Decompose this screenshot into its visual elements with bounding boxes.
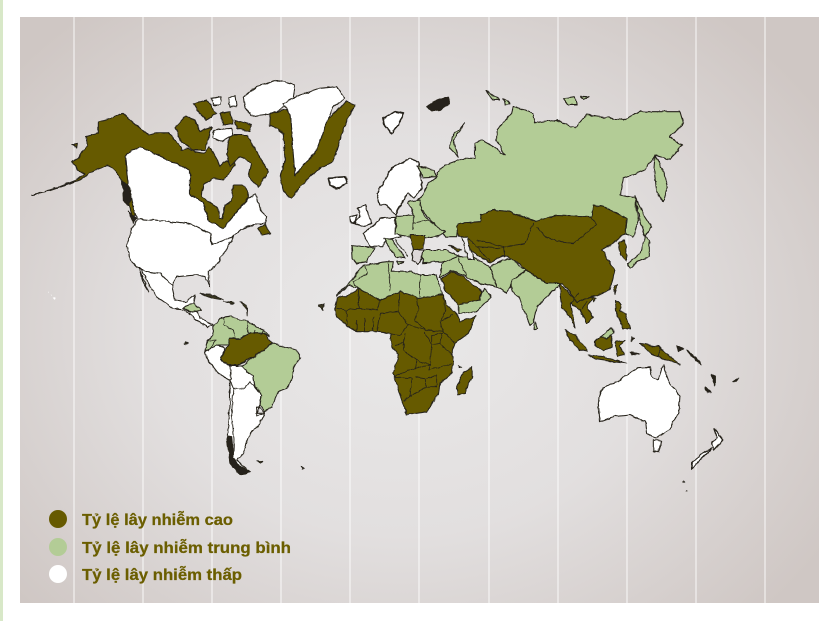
Canada interior, low prevalence bbox=[125, 147, 267, 245]
Korea bbox=[618, 240, 627, 260]
Country lines in northern South America bbox=[207, 318, 263, 351]
Arctic islands, low prevalence bbox=[212, 80, 295, 142]
Alaska and northern Canada, high prevalence bbox=[32, 113, 248, 228]
Colombia, Venezuela, Guianas, medium prevalence bbox=[205, 317, 269, 351]
Pacific islands bbox=[683, 374, 738, 491]
Russia, medium prevalence bbox=[413, 107, 683, 237]
legend item: high bbox=[49, 510, 233, 529]
Middle East and Iran, medium prevalence bbox=[440, 257, 497, 287]
Eastern Europe, medium prevalence bbox=[395, 200, 445, 238]
Turkey bbox=[422, 250, 460, 263]
Hainan and Taiwan bbox=[592, 285, 617, 302]
New Guinea bbox=[640, 343, 680, 364]
Kazakhstan, China, Mongolia, high prevalence bbox=[457, 205, 627, 302]
USA bbox=[127, 219, 233, 287]
region: North America bbox=[32, 80, 355, 344]
Sumatra bbox=[565, 330, 588, 352]
Canadian Arctic islands, high prevalence bbox=[175, 100, 268, 187]
North Africa, medium prevalence bbox=[337, 262, 442, 300]
Philippines bbox=[616, 300, 630, 328]
legend item: low: Tỷ lệ lây nhiễm thấp bbox=[82, 567, 242, 584]
Guatemala region, medium prevalence bbox=[183, 303, 202, 313]
Africa, high prevalence bbox=[335, 288, 475, 415]
Moluccas bbox=[630, 337, 640, 355]
Scandinavia, low prevalence bbox=[377, 158, 423, 215]
Kamchatka bbox=[654, 155, 667, 202]
Western Europe, low prevalence bbox=[363, 217, 402, 247]
Australia bbox=[598, 365, 680, 438]
Borneo bbox=[595, 333, 612, 351]
Bolivia, Paraguay and Chile borders bbox=[230, 366, 265, 457]
British Isles bbox=[350, 205, 372, 227]
Tasmania bbox=[653, 440, 662, 452]
Central Asia and Mongolia borders bbox=[468, 217, 597, 262]
Caucasus bbox=[448, 245, 462, 252]
Greenland coast, high prevalence bbox=[269, 102, 355, 198]
African country borders bbox=[337, 288, 455, 401]
Sakhalin and Japan bbox=[628, 197, 652, 268]
Greenland north, low prevalence bbox=[283, 87, 345, 176]
India bbox=[512, 270, 562, 329]
Indian Ocean and Atlantic islands bbox=[257, 304, 462, 469]
New Zealand bbox=[692, 428, 723, 469]
South America, low prevalence bbox=[205, 345, 265, 475]
Caribbean islands bbox=[184, 293, 324, 344]
Arctic Russian islands bbox=[450, 90, 588, 157]
legend item: high: Tỷ lệ lây nhiễm cao bbox=[82, 512, 233, 529]
region: Eurasia bbox=[337, 90, 702, 365]
Brazil, medium prevalence bbox=[242, 343, 301, 412]
region: South America and Africa bbox=[205, 288, 475, 475]
Java and Lesser Sunda bbox=[588, 355, 627, 363]
legend item: low bbox=[49, 565, 242, 584]
Spain and Portugal bbox=[352, 245, 375, 263]
world map bbox=[32, 80, 738, 491]
Italy bbox=[383, 238, 405, 265]
region: Oceania bbox=[598, 365, 738, 491]
Southeast Asia, high prevalence bbox=[560, 283, 593, 328]
Mexico and Central America bbox=[137, 267, 213, 327]
Amazon, high prevalence bbox=[221, 333, 273, 365]
Island arcs bbox=[677, 345, 702, 365]
Iceland bbox=[328, 177, 347, 188]
British Columbia coast bbox=[123, 182, 137, 223]
legend item: medium: Tỷ lệ lây nhiễm trung bình bbox=[82, 540, 291, 557]
Newfoundland and Alaska islands bbox=[73, 144, 271, 235]
Hawaii bbox=[47, 292, 56, 300]
Yemen and Oman, medium prevalence bbox=[458, 288, 492, 314]
Caspian Sea bbox=[462, 237, 475, 260]
Saudi Arabia, high prevalence bbox=[442, 272, 482, 305]
Madagascar bbox=[457, 367, 472, 395]
Sulawesi bbox=[615, 340, 625, 357]
Balkans bbox=[410, 235, 425, 250]
Afghanistan and Pakistan bbox=[490, 258, 527, 293]
Svalbard bbox=[383, 112, 404, 133]
Southern Chile coast bbox=[227, 436, 250, 475]
legend bbox=[49, 510, 291, 584]
